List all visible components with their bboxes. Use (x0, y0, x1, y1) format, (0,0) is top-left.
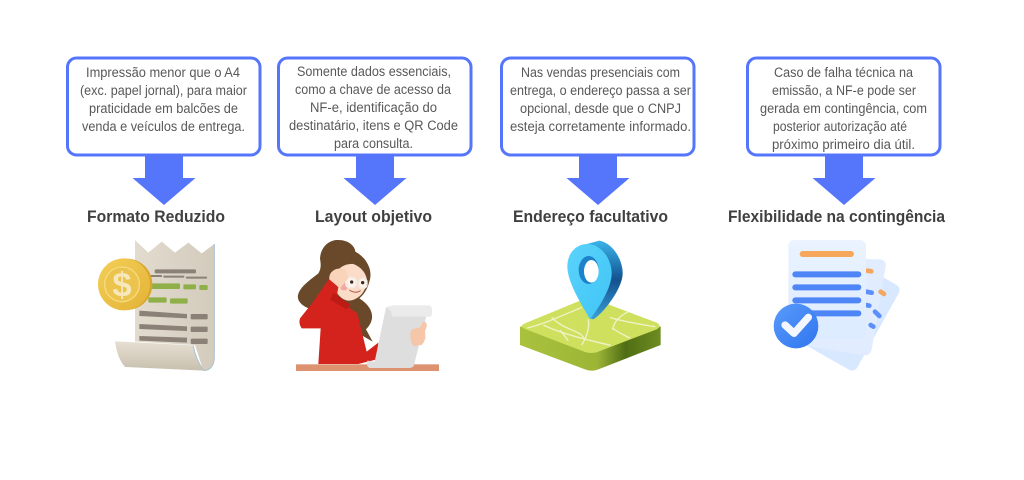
icon: receipt with coin (98, 240, 214, 371)
text box: formato reduzido: praticidade em balcões de (89, 101, 238, 116)
icon: receipt with coin: $ (112, 267, 132, 305)
text box: formato reduzido: (exc. papel jornal), para maior (80, 83, 247, 98)
arrow: formato reduzido (132, 156, 196, 205)
panel: endereço facultativo (502, 58, 694, 371)
text box: flexibilidade na contingência: Caso de falha técnica na (774, 65, 913, 80)
text box: layout objetivo: Somente dados essenciais, (297, 64, 451, 79)
text box: formato reduzido (68, 58, 260, 155)
text box: layout objetivo: para consulta. (334, 136, 413, 151)
icon: map with location pin (520, 241, 661, 371)
heading: flexibilidade na contingência: Flexibilidade na contingência (728, 208, 946, 226)
text box: flexibilidade na contingência: emissão, a NF-e pode ser (772, 83, 916, 98)
text box: layout objetivo: destinatário, itens e QR Code (289, 118, 458, 133)
text box: endereço facultativo (502, 58, 694, 155)
icon: documents with check mark (774, 240, 900, 371)
icon: woman reading document (296, 240, 439, 371)
text box: layout objetivo: NF-e, identificação do (310, 100, 437, 115)
heading: formato reduzido: Formato Reduzido (87, 208, 225, 226)
text box: endereço facultativo: opcional, desde que o CNPJ (520, 101, 681, 116)
panel: formato reduzido (68, 58, 260, 371)
text box: formato reduzido: venda e veículos de entrega. (82, 119, 245, 134)
text box: formato reduzido: Impressão menor que o A4 (86, 65, 240, 80)
arrow: flexibilidade na contingência (812, 156, 876, 205)
panel: flexibilidade na contingência (728, 58, 946, 371)
text box: flexibilidade na contingência: gerada em contingência, com (760, 101, 927, 116)
heading: endereço facultativo: Endereço facultativo (513, 208, 668, 226)
text box: layout objetivo: como a chave de acesso da (295, 82, 451, 97)
text box: flexibilidade na contingência (748, 58, 940, 155)
arrow: layout objetivo (344, 156, 406, 205)
text box: endereço facultativo: Nas vendas presenciais com (521, 65, 680, 80)
heading: layout objetivo: Layout objetivo (315, 208, 432, 226)
arrow: endereço facultativo (566, 156, 630, 205)
text box: flexibilidade na contingência: posterior autorização até (773, 119, 907, 134)
text box: endereço facultativo: esteja corretamente informado. (510, 119, 691, 134)
panel: layout objetivo (278, 58, 471, 371)
text box: endereço facultativo: entrega, o endereço passa a ser (510, 83, 691, 98)
text box: flexibilidade na contingência: próximo primeiro dia útil. (772, 137, 915, 152)
text box: layout objetivo (278, 58, 471, 155)
